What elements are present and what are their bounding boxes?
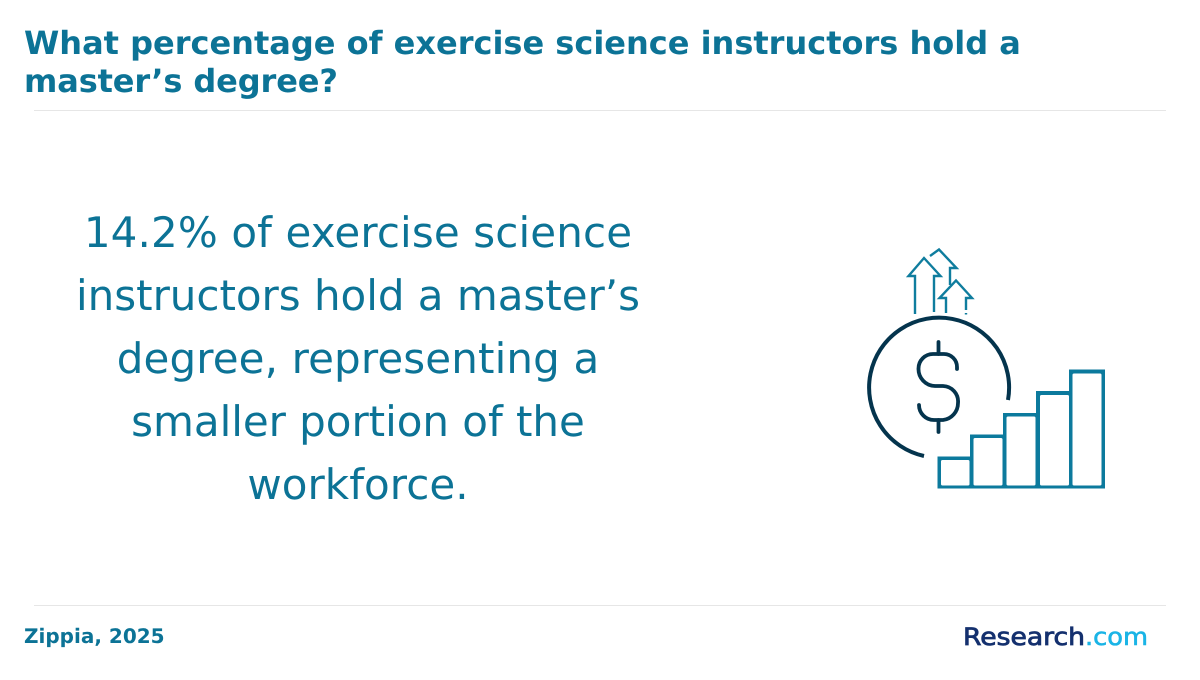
main statement text [76,208,640,509]
icon: coin circle [869,318,1009,456]
title: master’s degree? [24,62,338,100]
main statement text: smaller portion of the [131,397,585,446]
icon: dollar sign [918,342,958,432]
title [24,24,1021,100]
title: What percentage of exercise science instructors hold a [24,24,1021,62]
main statement text: 14.2% of exercise science [84,208,632,257]
bar chart icon [938,370,1105,488]
source label: Zippia, 2025 [24,624,165,648]
main statement text: instructors hold a master’s [76,271,640,320]
main statement text: workforce. [247,460,469,509]
logo: Research.com [963,623,1148,651]
logo: Research.com: Research [963,623,1085,651]
logo: Research.com: .com [1085,623,1148,651]
icon: upward arrows [908,250,972,316]
main statement text: degree, representing a [117,334,599,383]
icon: dollar coin with rising bars and arrows [867,248,1105,488]
